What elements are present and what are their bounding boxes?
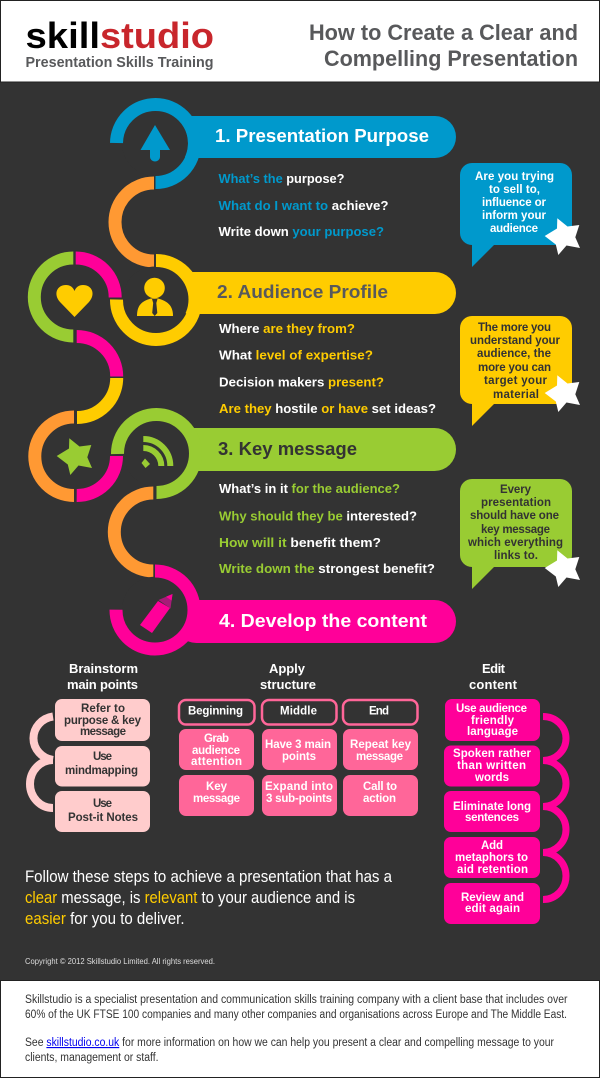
callout: blue: inform your — [482, 210, 547, 222]
step 2 questions: Decision makers present? — [219, 374, 384, 390]
step 1 questions: Write down your purpose? — [218, 224, 384, 239]
callout: green: key message — [481, 524, 550, 536]
box: repeat key message: message — [356, 751, 403, 763]
callout: blue: Are you trying — [475, 171, 554, 183]
title: How to Create a Clear and — [309, 20, 578, 45]
step 3 questions: How will it benefit them? — [219, 535, 381, 550]
callout: yellow: The more you — [478, 322, 551, 334]
header band — [0, 0, 600, 82]
icon: rss — [142, 439, 170, 468]
step 2 banner — [170, 272, 456, 314]
logo: skill — [26, 15, 100, 56]
website invitation — [25, 1037, 554, 1064]
step 4 heading: 4. Develop the content — [219, 611, 427, 631]
icon: pencil — [140, 594, 172, 633]
connector: pink and yellow curve — [77, 336, 117, 418]
box: key message: message — [193, 793, 240, 805]
step 3 banner — [170, 428, 456, 471]
column heading — [67, 661, 138, 692]
green arc — [34, 258, 73, 336]
box: review and edit again: edit again — [465, 903, 520, 915]
box: eliminate long sentences: Eliminate long — [453, 801, 531, 813]
column heading: Apply — [269, 661, 306, 676]
callout: blue — [460, 163, 580, 267]
logo: Presentation Skills Training — [26, 54, 214, 71]
box: grab audience attention: audience — [192, 745, 240, 757]
step 2 questions: What level of expertise? — [219, 348, 373, 362]
box: eliminate long sentences: sentences — [465, 812, 519, 824]
closing statement — [25, 867, 392, 928]
icon: up arrow — [140, 125, 170, 162]
step 3 questions: Why should they be interested? — [219, 508, 417, 524]
step 2 questions: Are they hostile or have set ideas? — [219, 401, 436, 416]
box: refer to purpose: purpose & key — [64, 715, 142, 727]
callout: blue: to sell to, — [489, 184, 540, 196]
callout: green: presentation — [481, 497, 551, 509]
box: expand into sub-points — [262, 775, 337, 816]
pink arc — [77, 456, 116, 496]
box: use mindmapping — [55, 746, 150, 786]
box: spoken rather than written: Spoken rather — [453, 748, 532, 760]
footer panel — [0, 980, 600, 1078]
step 2 questions — [219, 321, 436, 416]
header: beginning: Beginning — [188, 706, 243, 718]
step 3 heading: 3. Key message — [218, 439, 357, 459]
box: use audience friendly language: friendly — [471, 715, 515, 727]
callout: yellow — [460, 316, 580, 426]
callout: yellow: target your — [484, 375, 548, 387]
step 2: audience profile — [116, 260, 456, 416]
step 1 questions — [218, 171, 389, 239]
connector: orange curve — [115, 183, 154, 261]
box: eliminate long sentences — [444, 791, 540, 832]
callout: green: Every — [500, 484, 532, 496]
closing statement: Follow these steps to achieve a presentation that has a — [25, 867, 392, 886]
column: apply structure — [179, 661, 418, 816]
box: add metaphors: aid retention — [457, 864, 528, 876]
column heading: Brainstorm — [69, 661, 138, 676]
callout: yellow: understand your — [470, 335, 561, 347]
step 4: develop the content — [116, 571, 456, 649]
website invitation: See skillstudio.co.uk for more information on how we can help you present a clear and compelling message to your — [25, 1037, 554, 1049]
box: call to action — [343, 775, 418, 816]
step 1 arc — [116, 105, 194, 182]
callout: yellow: audience, the — [477, 348, 551, 360]
connector arcs — [543, 716, 566, 900]
step 3 questions — [219, 481, 435, 576]
copyright: Copyright © 2012 Skillstudio Limited. All rights reserved. — [25, 956, 215, 966]
box: call to action: Call to — [363, 781, 397, 793]
closing statement: easier for you to deliver. — [25, 909, 184, 928]
step 1 questions: What do I want to achieve? — [218, 198, 389, 213]
box: spoken rather than written: words — [474, 772, 509, 784]
logo — [26, 15, 214, 71]
box: call to action: action — [363, 793, 396, 805]
box: refer to purpose — [55, 699, 150, 741]
box: grab audience attention — [179, 729, 254, 770]
box: spoken rather than written: than written — [457, 760, 526, 772]
box: spoken rather than written — [444, 746, 540, 786]
column heading: main points — [67, 677, 138, 692]
callout: green: links to. — [494, 550, 538, 562]
company description — [25, 994, 568, 1021]
column heading — [260, 661, 316, 692]
closing statement: clear message, is relevant to your audience and is — [25, 888, 355, 907]
website invitation: clients, management or staff. — [25, 1052, 158, 1064]
column: brainstorm main points — [30, 661, 150, 832]
callout: green — [460, 479, 580, 589]
callout: blue: influence or — [482, 197, 547, 209]
step 1 heading: 1. Presentation Purpose — [215, 126, 429, 146]
column: edit content — [444, 661, 566, 924]
column heading: Edit — [482, 661, 506, 676]
box: add metaphors: metaphors to — [455, 852, 528, 864]
column heading: structure — [260, 677, 316, 692]
header: beginning — [179, 700, 254, 724]
connector arcs — [30, 716, 53, 808]
step 2 arc — [116, 260, 195, 340]
box: use post-it notes — [55, 791, 150, 832]
box: add metaphors — [444, 837, 540, 878]
header: end — [343, 700, 418, 724]
icon: star — [57, 438, 92, 475]
step 3 questions: Write down the strongest benefit? — [219, 561, 435, 576]
box: grab audience attention: Grab — [204, 733, 229, 745]
step 1: presentation purpose — [116, 105, 456, 239]
box: grab audience attention: attention — [191, 756, 242, 768]
step 2 questions: Where are they from? — [219, 321, 355, 336]
header: middle — [262, 700, 336, 724]
box: use audience friendly language: Use audience — [456, 703, 527, 715]
star loop — [35, 417, 116, 496]
step 3: key message — [117, 414, 456, 576]
box: have 3 main points: points — [282, 751, 316, 763]
title — [309, 20, 578, 71]
box: have 3 main points: Have 3 main — [265, 739, 331, 751]
box: add metaphors: Add — [481, 840, 503, 852]
box: repeat key message: Repeat key — [350, 739, 412, 751]
box: use post-it notes: Use — [93, 798, 112, 810]
box: key message — [179, 775, 254, 816]
step 1 questions: What’s the purpose? — [218, 171, 345, 186]
step 4 banner — [175, 600, 456, 643]
heart loop — [34, 258, 115, 336]
icon: person — [137, 278, 173, 316]
box: repeat key message — [343, 729, 418, 770]
callout: yellow: more you can — [478, 362, 551, 374]
header: end: End — [369, 706, 389, 718]
logo: studio — [100, 15, 214, 56]
box: review and edit again: Review and — [461, 892, 524, 904]
column heading: content — [469, 677, 518, 692]
box: use mindmapping: mindmapping — [65, 765, 138, 777]
step 1 banner — [170, 116, 456, 158]
connector: lower orange curve — [114, 493, 153, 571]
step 2 heading: 2. Audience Profile — [217, 282, 388, 302]
box: use mindmapping: Use — [93, 751, 112, 763]
column heading — [469, 661, 518, 692]
callout: yellow: material — [493, 389, 539, 401]
callout: green: should have one — [470, 510, 559, 522]
box: refer to purpose: message — [80, 726, 126, 738]
box: refer to purpose: Refer to — [81, 703, 125, 715]
step 4 arc — [116, 571, 194, 649]
box: use post-it notes: Post-it Notes — [68, 812, 138, 824]
step 3 questions: What’s in it for the audience? — [219, 481, 400, 496]
header: middle: Middle — [280, 706, 317, 718]
box: expand into sub-points: Expand into — [265, 781, 333, 793]
title: Compelling Presentation — [324, 46, 578, 71]
pink arc — [76, 258, 115, 298]
box: review and edit again — [444, 883, 540, 924]
step 3 arc — [117, 414, 195, 492]
box: use audience friendly language: language — [467, 726, 518, 738]
callout: green: which everything — [467, 537, 563, 549]
callout: blue: audience — [490, 223, 538, 235]
icon: heart — [56, 285, 93, 317]
box: key message: Key — [206, 781, 228, 793]
box: use audience friendly language — [445, 699, 540, 741]
box: expand into sub-points: 3 sub-points — [266, 793, 332, 805]
orange arc — [35, 417, 74, 496]
box: have 3 main points — [262, 729, 337, 770]
